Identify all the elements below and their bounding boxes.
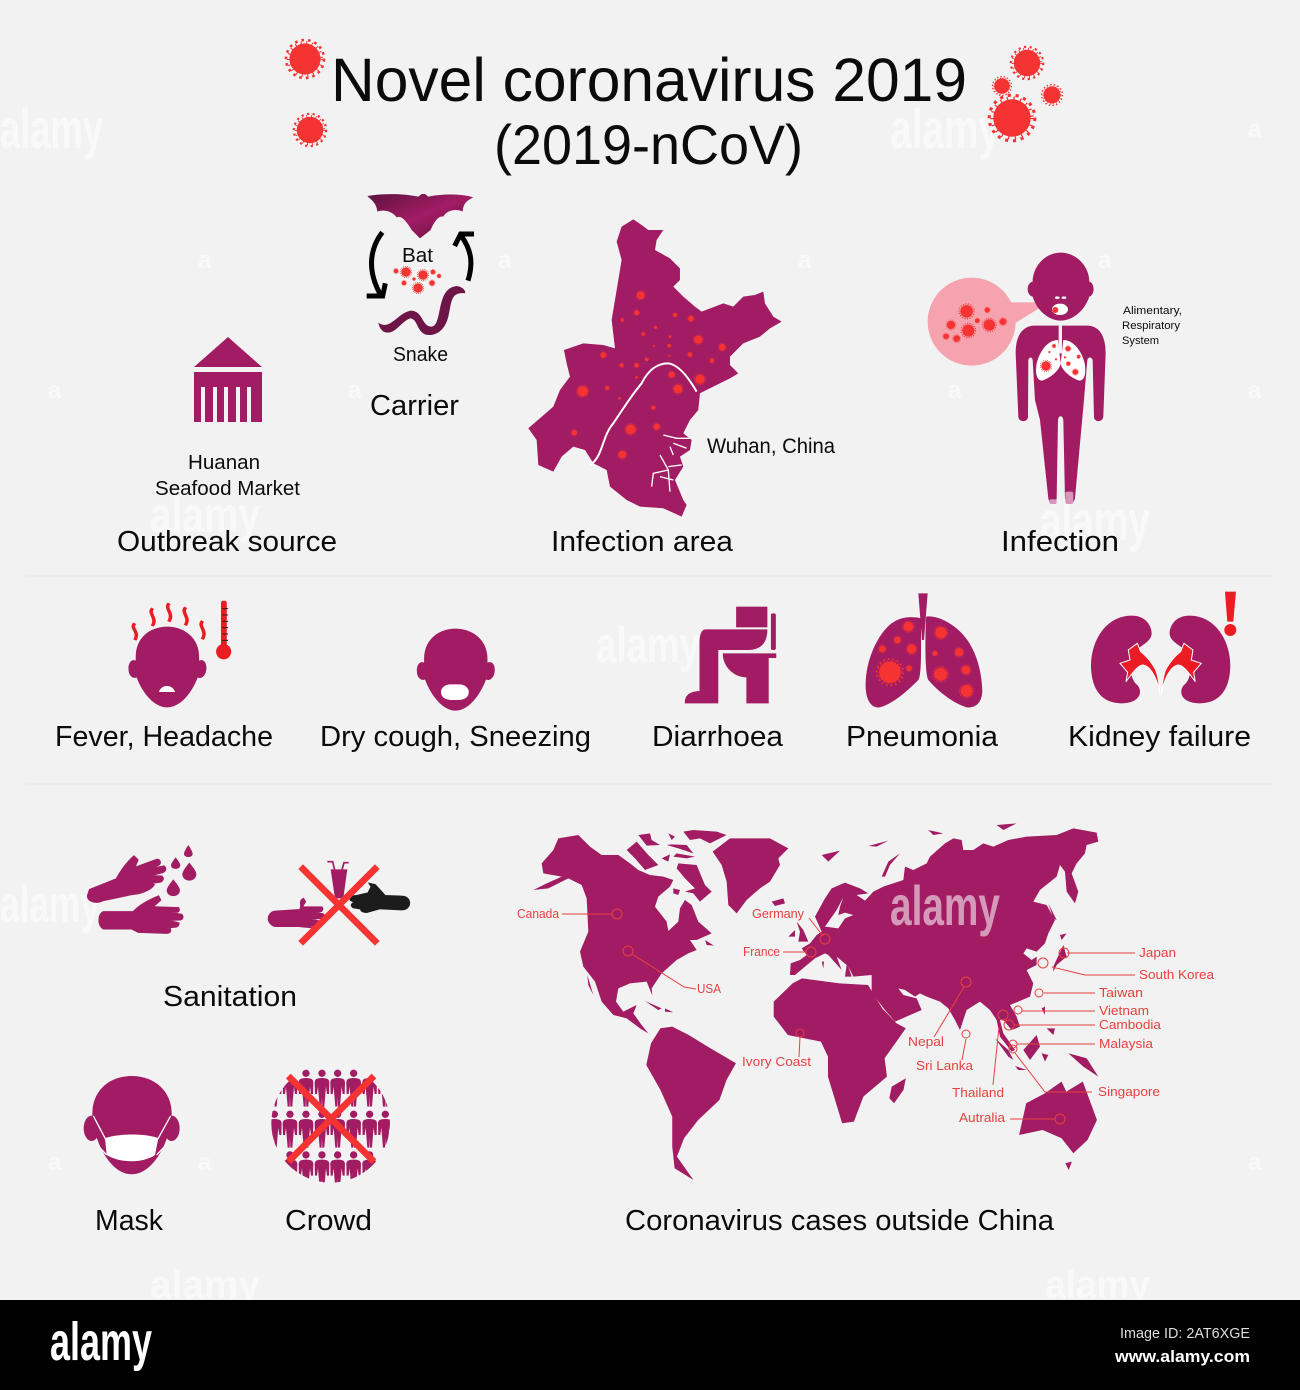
label: cough: Dry cough, Sneezing	[320, 721, 591, 753]
label: pneumonia: Pneumonia	[846, 721, 999, 753]
country labels: Germany	[752, 906, 804, 921]
map: Wuhan	[528, 219, 782, 517]
label: mask: Mask	[95, 1205, 163, 1237]
panel: prevention	[84, 845, 409, 1237]
country labels: France	[743, 944, 780, 959]
label: snake: Snake	[393, 344, 448, 366]
label: affected systems: System	[1122, 335, 1159, 347]
icon: masked head	[84, 1076, 180, 1174]
panel: infection	[928, 253, 1182, 558]
panel: world map	[517, 823, 1215, 1237]
country labels: Vietnam	[1099, 1003, 1149, 1018]
watermarks: alamy	[150, 1263, 261, 1307]
market name: Seafood Market	[155, 478, 300, 500]
callout: virus bubble	[928, 278, 1048, 366]
heading: outbreak source: Outbreak source	[117, 526, 337, 558]
market name	[155, 452, 300, 500]
label: Wuhan, China: Wuhan, China	[707, 435, 835, 458]
title: (2019-nCoV)	[494, 113, 803, 176]
watermarks: a	[798, 247, 812, 274]
watermarks: a	[1248, 1149, 1262, 1176]
watermarks: a	[498, 247, 512, 274]
watermarks: alamy	[596, 617, 700, 673]
icon: lungs	[866, 593, 982, 707]
country labels: Taiwan	[1099, 985, 1143, 1000]
footer bar	[0, 1300, 1300, 1390]
panel: infection area	[528, 219, 835, 558]
country labels: Japan	[1139, 945, 1176, 960]
watermarks: alamy	[890, 97, 1000, 160]
icon: washing hands	[88, 845, 196, 933]
country labels: USA	[697, 981, 721, 996]
label: affected systems: Respiratory	[1122, 320, 1181, 332]
country labels: Cambodia	[1099, 1017, 1162, 1032]
icon: toilet	[685, 607, 776, 703]
watermarks: a	[1098, 247, 1112, 274]
watermarks: a	[48, 377, 62, 404]
country labels	[517, 906, 1215, 1125]
watermarks: a	[48, 1149, 62, 1176]
icon: kidneys	[1091, 592, 1236, 703]
watermarks: a	[1248, 377, 1262, 404]
panel: carrier	[367, 194, 474, 422]
icon: virus particles	[393, 266, 441, 294]
panel: outbreak source	[117, 337, 337, 558]
label: fever: Fever, Headache	[55, 721, 273, 753]
icon: bat	[367, 194, 473, 238]
country labels: Canada	[517, 906, 560, 921]
arrow: snake to bat	[455, 234, 474, 281]
watermarks: a	[198, 1149, 212, 1176]
icon: human figure	[1016, 253, 1106, 504]
watermarks: alamy	[0, 876, 100, 934]
watermarks: a	[198, 247, 212, 274]
icon: market building	[194, 337, 262, 422]
footer logo: alamy	[50, 1312, 152, 1372]
title: Novel coronavirus 2019	[331, 46, 967, 114]
icon: virus cluster right	[989, 47, 1062, 141]
country labels: Ivory Coast	[742, 1054, 811, 1069]
label: crowd: Crowd	[285, 1205, 372, 1237]
icon: crowd	[267, 1070, 393, 1188]
arrow: bat to snake	[367, 232, 385, 296]
panel: symptoms	[55, 592, 1251, 753]
heading: cases outside China: Coronavirus cases outside China	[625, 1205, 1055, 1237]
watermark on map: alamy	[890, 874, 1000, 937]
country labels: Singapore	[1098, 1084, 1160, 1099]
icon: virus cluster left	[286, 40, 326, 146]
icon: no contact	[269, 862, 409, 943]
country labels: Nepal	[908, 1034, 944, 1049]
watermarks: alamy	[1045, 1263, 1151, 1307]
watermarks: a	[948, 377, 962, 404]
heading: sanitation: Sanitation	[163, 981, 297, 1013]
label: affected systems: Alimentary,	[1123, 305, 1182, 317]
country labels: Autralia	[959, 1110, 1006, 1125]
label: diarrhoea: Diarrhoea	[652, 721, 784, 753]
map leader lines	[562, 909, 1135, 1124]
market name: Huanan	[188, 452, 260, 474]
watermarks: alamy	[0, 97, 103, 160]
title	[331, 46, 967, 176]
footer url: www.alamy.com	[1114, 1347, 1250, 1366]
icon: snake	[378, 286, 465, 335]
map: world	[533, 823, 1098, 1180]
watermarks: alamy	[150, 487, 260, 543]
country labels: South Korea	[1139, 967, 1215, 982]
footer image id: Image ID: 2AT6XGE	[1120, 1325, 1250, 1342]
heading: carrier: Carrier	[370, 390, 459, 422]
heading: infection: Infection	[1001, 526, 1119, 558]
country labels: Malaysia	[1099, 1036, 1154, 1051]
country labels: Thailand	[952, 1085, 1004, 1100]
label: kidney failure: Kidney failure	[1068, 721, 1251, 753]
label: bat: Bat	[402, 245, 433, 267]
watermarks: a	[348, 377, 362, 404]
icon: coughing head	[417, 629, 495, 711]
country labels: Sri Lanka	[916, 1058, 974, 1073]
heading: infection area: Infection area	[551, 526, 734, 558]
watermarks: a	[1248, 116, 1262, 143]
icon: fever head and thermometer	[128, 601, 231, 707]
label: affected systems	[1122, 305, 1182, 347]
watermarks: alamy	[1040, 489, 1150, 552]
